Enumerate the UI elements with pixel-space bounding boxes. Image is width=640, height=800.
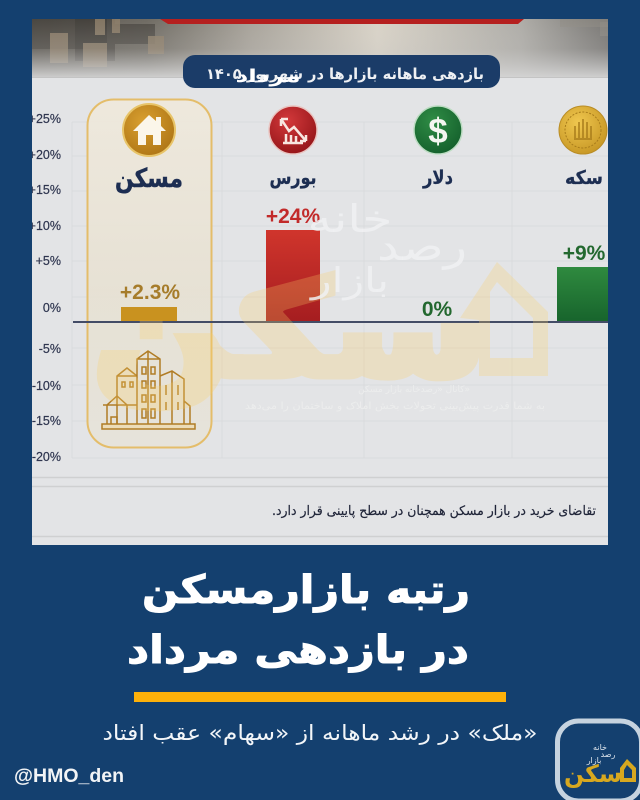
- bar: housing: [121, 307, 177, 322]
- column: gold coin: [557, 106, 608, 322]
- value: 0%: 0%: [422, 298, 452, 321]
- value: +24%: +24%: [266, 205, 320, 228]
- footnote: تقاضای خرید در بازار مسکن همچنان در سطح پایینی قرار دارد.: [272, 504, 596, 519]
- logo badge: خانه: [593, 743, 607, 752]
- label: housing: مسکن: [115, 164, 183, 194]
- label: stocks: بورس: [270, 167, 316, 189]
- panel: market returns chart: [29, 19, 608, 545]
- logo badge: بازار: [586, 756, 601, 765]
- watermark logo: بازار: [308, 261, 389, 301]
- subtitle: «ملک» در رشد ماهانه از «سهام» عقب افتاد: [102, 721, 538, 745]
- bar: coin: [557, 267, 608, 322]
- label: dollar: دلار: [422, 167, 453, 189]
- title line two: در بازدهی مرداد: [127, 628, 469, 673]
- y axis labels: [32, 114, 61, 462]
- y axis labels: 0%: [43, 301, 61, 315]
- label: coin: سکه: [565, 167, 603, 189]
- y axis labels: +10%: [29, 219, 61, 233]
- footer rules: [32, 478, 608, 536]
- column: stock market: [266, 106, 320, 322]
- logo badge: [558, 721, 640, 800]
- y axis labels: +25%: [29, 112, 61, 126]
- y axis labels: +20%: [29, 148, 61, 162]
- logo badge: سکن: [564, 760, 622, 788]
- red header ribbon: [160, 19, 524, 24]
- value: +9%: +9%: [563, 242, 606, 265]
- chart title pill: بازدهی ماهانه بازارها در شهریور ۱۴۰۵: [206, 65, 484, 83]
- watermark logo: سکن: [92, 254, 488, 407]
- y axis labels: +15%: [29, 183, 61, 197]
- highlighted housing card: [88, 100, 212, 448]
- gold divider: [134, 692, 506, 702]
- watermark logo: [92, 197, 548, 412]
- watermark logo: خانه: [308, 197, 392, 241]
- y axis labels: -5%: [39, 342, 61, 356]
- main title: [127, 568, 470, 673]
- header photo strip: [32, 19, 608, 78]
- watermark logo: کانال «رصدخانه بازار مسکن»: [358, 385, 470, 395]
- icon: dollar: [414, 106, 462, 154]
- icon: house: [123, 104, 175, 156]
- y axis labels: -15%: [32, 414, 61, 428]
- y axis labels: +5%: [36, 254, 61, 268]
- y axis labels: -10%: [32, 379, 61, 393]
- overlay month: مرداد: [236, 66, 300, 87]
- icon: coin: [559, 106, 607, 154]
- handle: @HMO_den: [14, 765, 124, 787]
- column: dollar: [414, 106, 462, 321]
- main title: رتبه بازارمسکن: [142, 568, 470, 613]
- y axis labels: -20%: [32, 450, 61, 464]
- logo badge: رصد: [601, 750, 616, 759]
- icon: dollar: $: [428, 112, 448, 151]
- chart title pill: [183, 55, 500, 88]
- zero baseline: [73, 321, 608, 323]
- grid lines: [72, 122, 608, 458]
- icon: falling chart: [269, 106, 317, 154]
- bar: stocks: [266, 230, 320, 322]
- watermark logo: به شما قدرت پیش‌بینی تحولات بخش املاک و ساختمان را می‌دهد: [245, 401, 545, 412]
- watermark logo: رصد: [377, 224, 467, 270]
- icon: buildings: [102, 351, 195, 429]
- value: +2.3%: +2.3%: [120, 281, 180, 304]
